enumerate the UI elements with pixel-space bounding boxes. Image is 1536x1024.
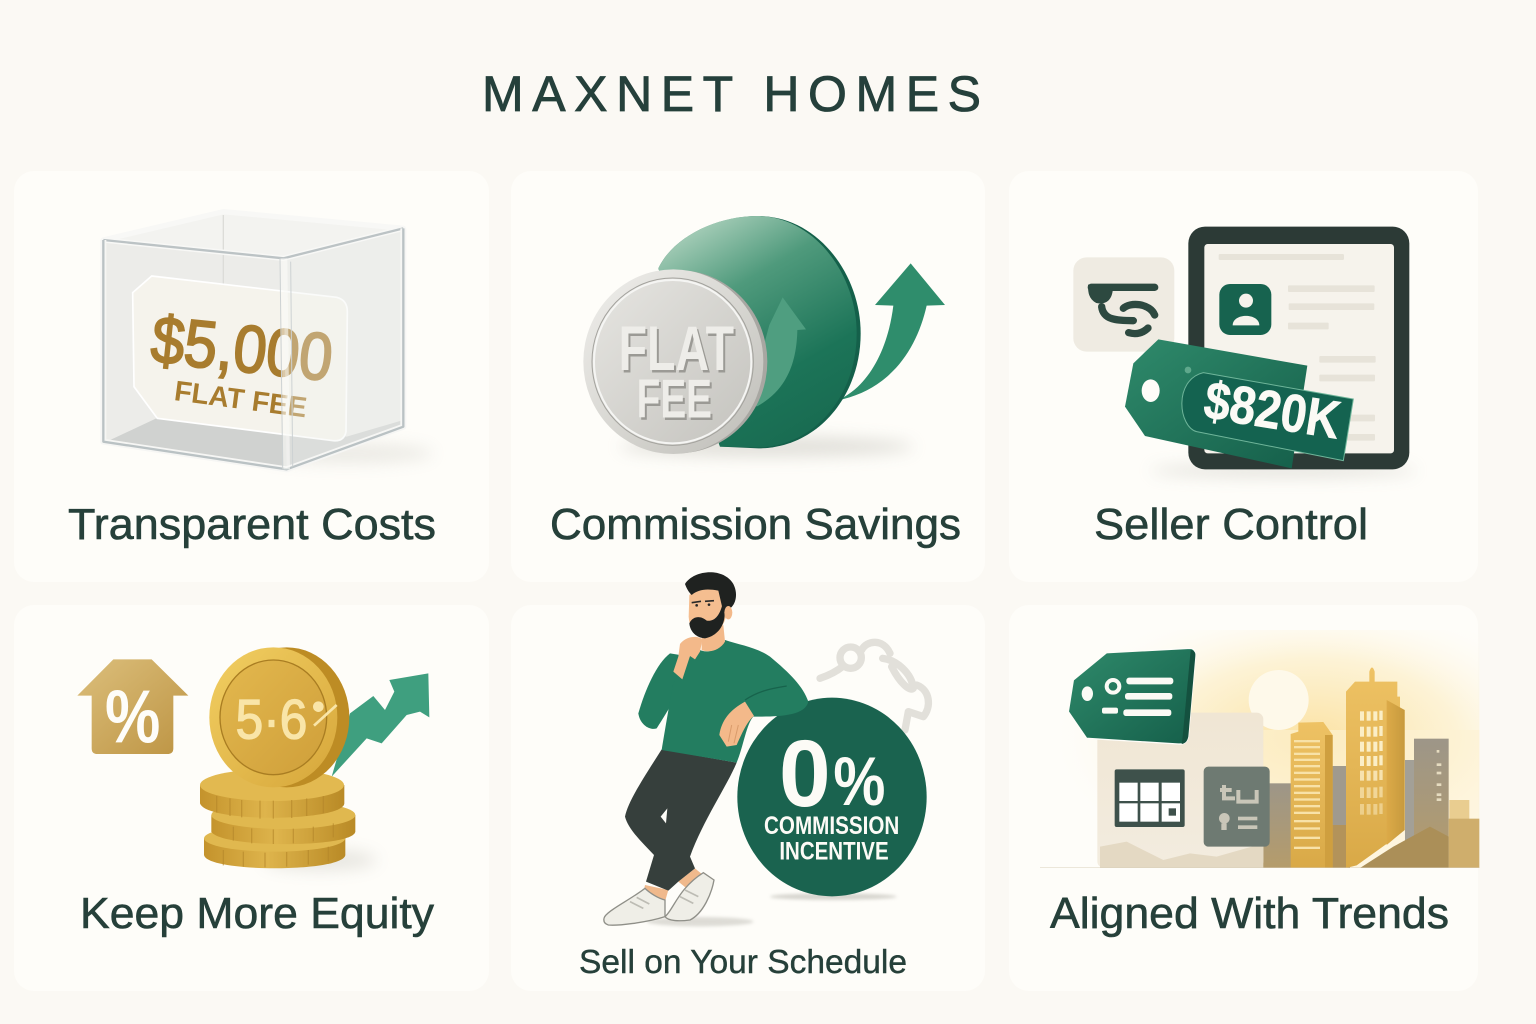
listing tag xyxy=(1068,648,1195,744)
control icon xyxy=(1089,286,1155,334)
window grid xyxy=(1115,769,1185,827)
panel: aligned with trends xyxy=(1009,605,1479,991)
icon: gold coin stack with arrow xyxy=(200,647,429,870)
price pill: $820K xyxy=(1200,371,1345,451)
commission ball: % xyxy=(833,744,885,820)
coin stack xyxy=(200,769,355,868)
hair xyxy=(685,572,736,615)
ankles xyxy=(643,868,705,902)
coin text xyxy=(619,314,736,432)
panel: seller control xyxy=(1009,171,1478,582)
ghost chain xyxy=(820,642,928,730)
label: Commission Savings xyxy=(550,500,961,549)
label: Aligned With Trends xyxy=(1050,889,1449,938)
label: Sell on Your Schedule xyxy=(579,943,907,980)
panel: transparent costs xyxy=(14,171,489,582)
icon: listing tablet and price tag xyxy=(1073,227,1417,477)
coin text: FEE xyxy=(637,368,712,430)
tall gold tower xyxy=(1346,667,1405,868)
flat fee price tag xyxy=(133,276,347,441)
commission ball: 0 xyxy=(779,721,831,827)
panel: sell on your schedule xyxy=(511,572,985,991)
info plaque xyxy=(1204,767,1270,847)
man xyxy=(604,572,808,925)
label: Keep More Equity xyxy=(80,889,434,938)
sweater xyxy=(662,640,808,763)
hand on chin xyxy=(673,637,702,679)
flat fee price tag: FLAT FEE xyxy=(172,375,309,424)
icon: house with percent xyxy=(77,659,188,759)
distant buildings xyxy=(1260,739,1479,868)
neck xyxy=(702,625,725,651)
hand on hip xyxy=(719,702,754,747)
face xyxy=(689,588,727,637)
commission ball xyxy=(737,698,927,896)
coin text: FEE xyxy=(639,370,714,432)
icon: flat fee coin, green disc and arrow xyxy=(583,216,945,457)
illustration: city skyline and listing tag xyxy=(1040,630,1479,868)
large coin: 5·6 xyxy=(236,687,307,750)
left arm xyxy=(638,653,690,729)
coin text: FLAT xyxy=(619,314,734,384)
label: Seller Control xyxy=(1094,500,1368,549)
pants xyxy=(625,749,737,891)
commission ball: INCENTIVE xyxy=(779,837,889,865)
large coin xyxy=(209,647,349,787)
shoes xyxy=(604,888,665,925)
icon: house with percent: % xyxy=(105,675,160,759)
label: Transparent Costs xyxy=(68,500,436,549)
icon: glass cube with flat fee tag xyxy=(103,212,433,469)
rising arrow xyxy=(837,263,945,401)
flat fee price tag: $5,000 xyxy=(148,303,336,396)
beard xyxy=(689,603,725,638)
panel: commission savings xyxy=(511,171,985,582)
panel: keep more equity xyxy=(14,605,489,991)
title: MAXNET HOMES xyxy=(482,66,981,122)
coin text: FLAT xyxy=(621,317,736,387)
rising arrow xyxy=(332,673,429,777)
commission ball: COMMISSION xyxy=(764,812,899,840)
short gold tower xyxy=(1291,722,1333,868)
illustration: man leaning on commission ball xyxy=(604,572,928,926)
beige building xyxy=(1097,713,1270,868)
avatar xyxy=(1219,284,1271,335)
